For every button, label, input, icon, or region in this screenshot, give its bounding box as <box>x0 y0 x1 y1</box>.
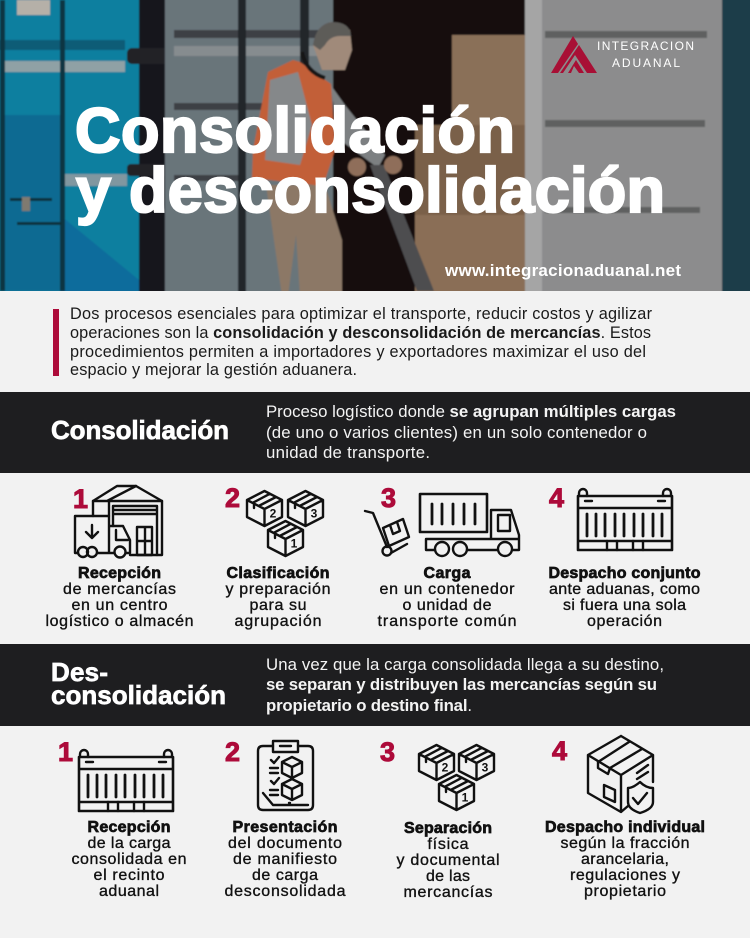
label: del documento <box>228 835 342 852</box>
label: Presentación <box>232 819 338 836</box>
label: mercancías <box>404 884 492 901</box>
band description: unidad de transporte. <box>266 443 430 462</box>
label: Separación <box>404 820 492 837</box>
label <box>224 819 346 900</box>
label: arancelaria, <box>581 851 669 868</box>
number: 4 <box>552 736 567 766</box>
label <box>226 565 330 630</box>
icon: numbered boxes: 2 <box>442 760 449 774</box>
label: de la carga <box>88 835 171 852</box>
number: 1 <box>58 737 73 767</box>
label: o unidad de <box>402 597 492 614</box>
logo wordmark <box>597 39 694 70</box>
label: en un contenedor <box>380 581 515 598</box>
label: transporte común <box>378 613 516 630</box>
icon: numbered boxes: 2 <box>270 506 277 520</box>
number: 3 <box>380 737 395 767</box>
label: de mercancías <box>63 581 176 598</box>
step 3 carga <box>365 483 519 630</box>
icon: numbered boxes <box>247 491 323 556</box>
title: Consolidación <box>75 96 515 166</box>
step 2 clasificación <box>225 483 330 630</box>
label: ante aduanas, como <box>549 581 700 598</box>
logo mark <box>551 36 597 73</box>
label: Despacho individual <box>545 819 705 836</box>
label <box>396 820 500 901</box>
step 1 recepción aduanal <box>58 737 186 900</box>
icon: numbered boxes: 3 <box>482 760 489 774</box>
label: aduanal <box>99 883 159 900</box>
band heading: Consolidación <box>51 415 229 445</box>
icon: numbered boxes: 1 <box>291 536 298 550</box>
band description: (de uno o varios clientes) en un solo contenedor o <box>266 423 647 442</box>
icon: container front <box>79 750 173 811</box>
label: y preparación <box>226 581 330 598</box>
number: 2 <box>225 737 240 767</box>
label: operación <box>587 613 662 630</box>
label: física <box>428 836 469 853</box>
band description: Una vez que la carga consolidada llega a su destino, <box>266 655 664 674</box>
band description <box>266 402 676 462</box>
step 3 separación <box>380 737 500 901</box>
panel: desconsolidación band <box>0 644 750 726</box>
label: en un centro <box>72 597 168 614</box>
label: desconsolidada <box>224 883 346 900</box>
label <box>548 565 701 630</box>
number: 1 <box>73 484 88 514</box>
label: Recepción <box>88 819 170 836</box>
icon: numbered boxes: 1 <box>462 790 469 804</box>
label: Clasificación <box>226 565 330 582</box>
band description <box>266 655 664 715</box>
number: 3 <box>381 483 396 513</box>
step 2 presentación <box>224 737 346 900</box>
label: Recepción <box>78 565 161 582</box>
band heading: consolidación <box>51 680 226 710</box>
intro paragraph <box>70 305 653 379</box>
step 4 despacho conjunto <box>548 483 701 630</box>
logo wordmark: ADUANAL <box>612 56 680 70</box>
logo <box>551 36 694 73</box>
band description: se separan y distribuyen las mercancías según su <box>266 675 657 694</box>
step 4 despacho individual <box>545 736 705 900</box>
logo wordmark: INTEGRACION <box>597 39 694 53</box>
intro paragraph: operaciones son la consolidación y desconsolidación de mercancías. Estos <box>70 324 651 342</box>
label: si fuera una sola <box>563 597 686 614</box>
icon: numbered boxes <box>419 745 494 810</box>
label: Carga <box>424 565 471 582</box>
label <box>46 565 194 630</box>
website url: www.integracionaduanal.net <box>444 261 681 280</box>
icon: box with shield <box>588 736 653 813</box>
step 1 recepción <box>46 484 194 630</box>
label: de carga <box>252 867 318 884</box>
label: agrupación <box>234 613 322 630</box>
icon: container front <box>578 489 672 550</box>
panel: consolidación band <box>0 392 750 473</box>
label: Despacho conjunto <box>548 565 701 582</box>
band description: propietario o destino final. <box>266 696 472 715</box>
label <box>545 819 705 900</box>
icon: numbered boxes: 3 <box>311 506 318 520</box>
intro paragraph: espacio y mejorar la gestión aduanera. <box>70 361 357 379</box>
label <box>72 819 186 900</box>
number: 4 <box>549 483 564 513</box>
icon: hand truck and container lorry <box>365 494 519 556</box>
band description: Proceso logístico donde se agrupan múltiples cargas <box>266 402 676 421</box>
title <box>75 96 665 226</box>
label: para su <box>250 597 306 614</box>
label: de las <box>426 868 470 885</box>
band heading: Des- <box>51 657 108 687</box>
label: según la fracción <box>560 835 690 852</box>
label <box>378 565 516 630</box>
icon: clipboard manifest <box>258 741 313 810</box>
hero photo: worker loading a container <box>0 0 750 296</box>
intro paragraph: procedimientos permiten a importadores y exportadores maximizar el uso del <box>70 343 646 361</box>
label: propietario <box>584 883 666 900</box>
band heading <box>51 657 226 710</box>
accent bar <box>53 309 59 376</box>
title: y desconsolidación <box>76 156 665 226</box>
label: consolidada en <box>72 851 186 868</box>
icon: warehouse and truck <box>75 486 162 558</box>
label: y documental <box>396 852 500 869</box>
label: de manifiesto <box>233 851 337 868</box>
label: logístico o almacén <box>46 613 194 630</box>
intro paragraph: Dos procesos esenciales para optimizar el transporte, reducir costos y agilizar <box>70 305 653 323</box>
number: 2 <box>225 483 240 513</box>
label: regulaciones y <box>570 867 680 884</box>
label: el recinto <box>94 867 165 884</box>
